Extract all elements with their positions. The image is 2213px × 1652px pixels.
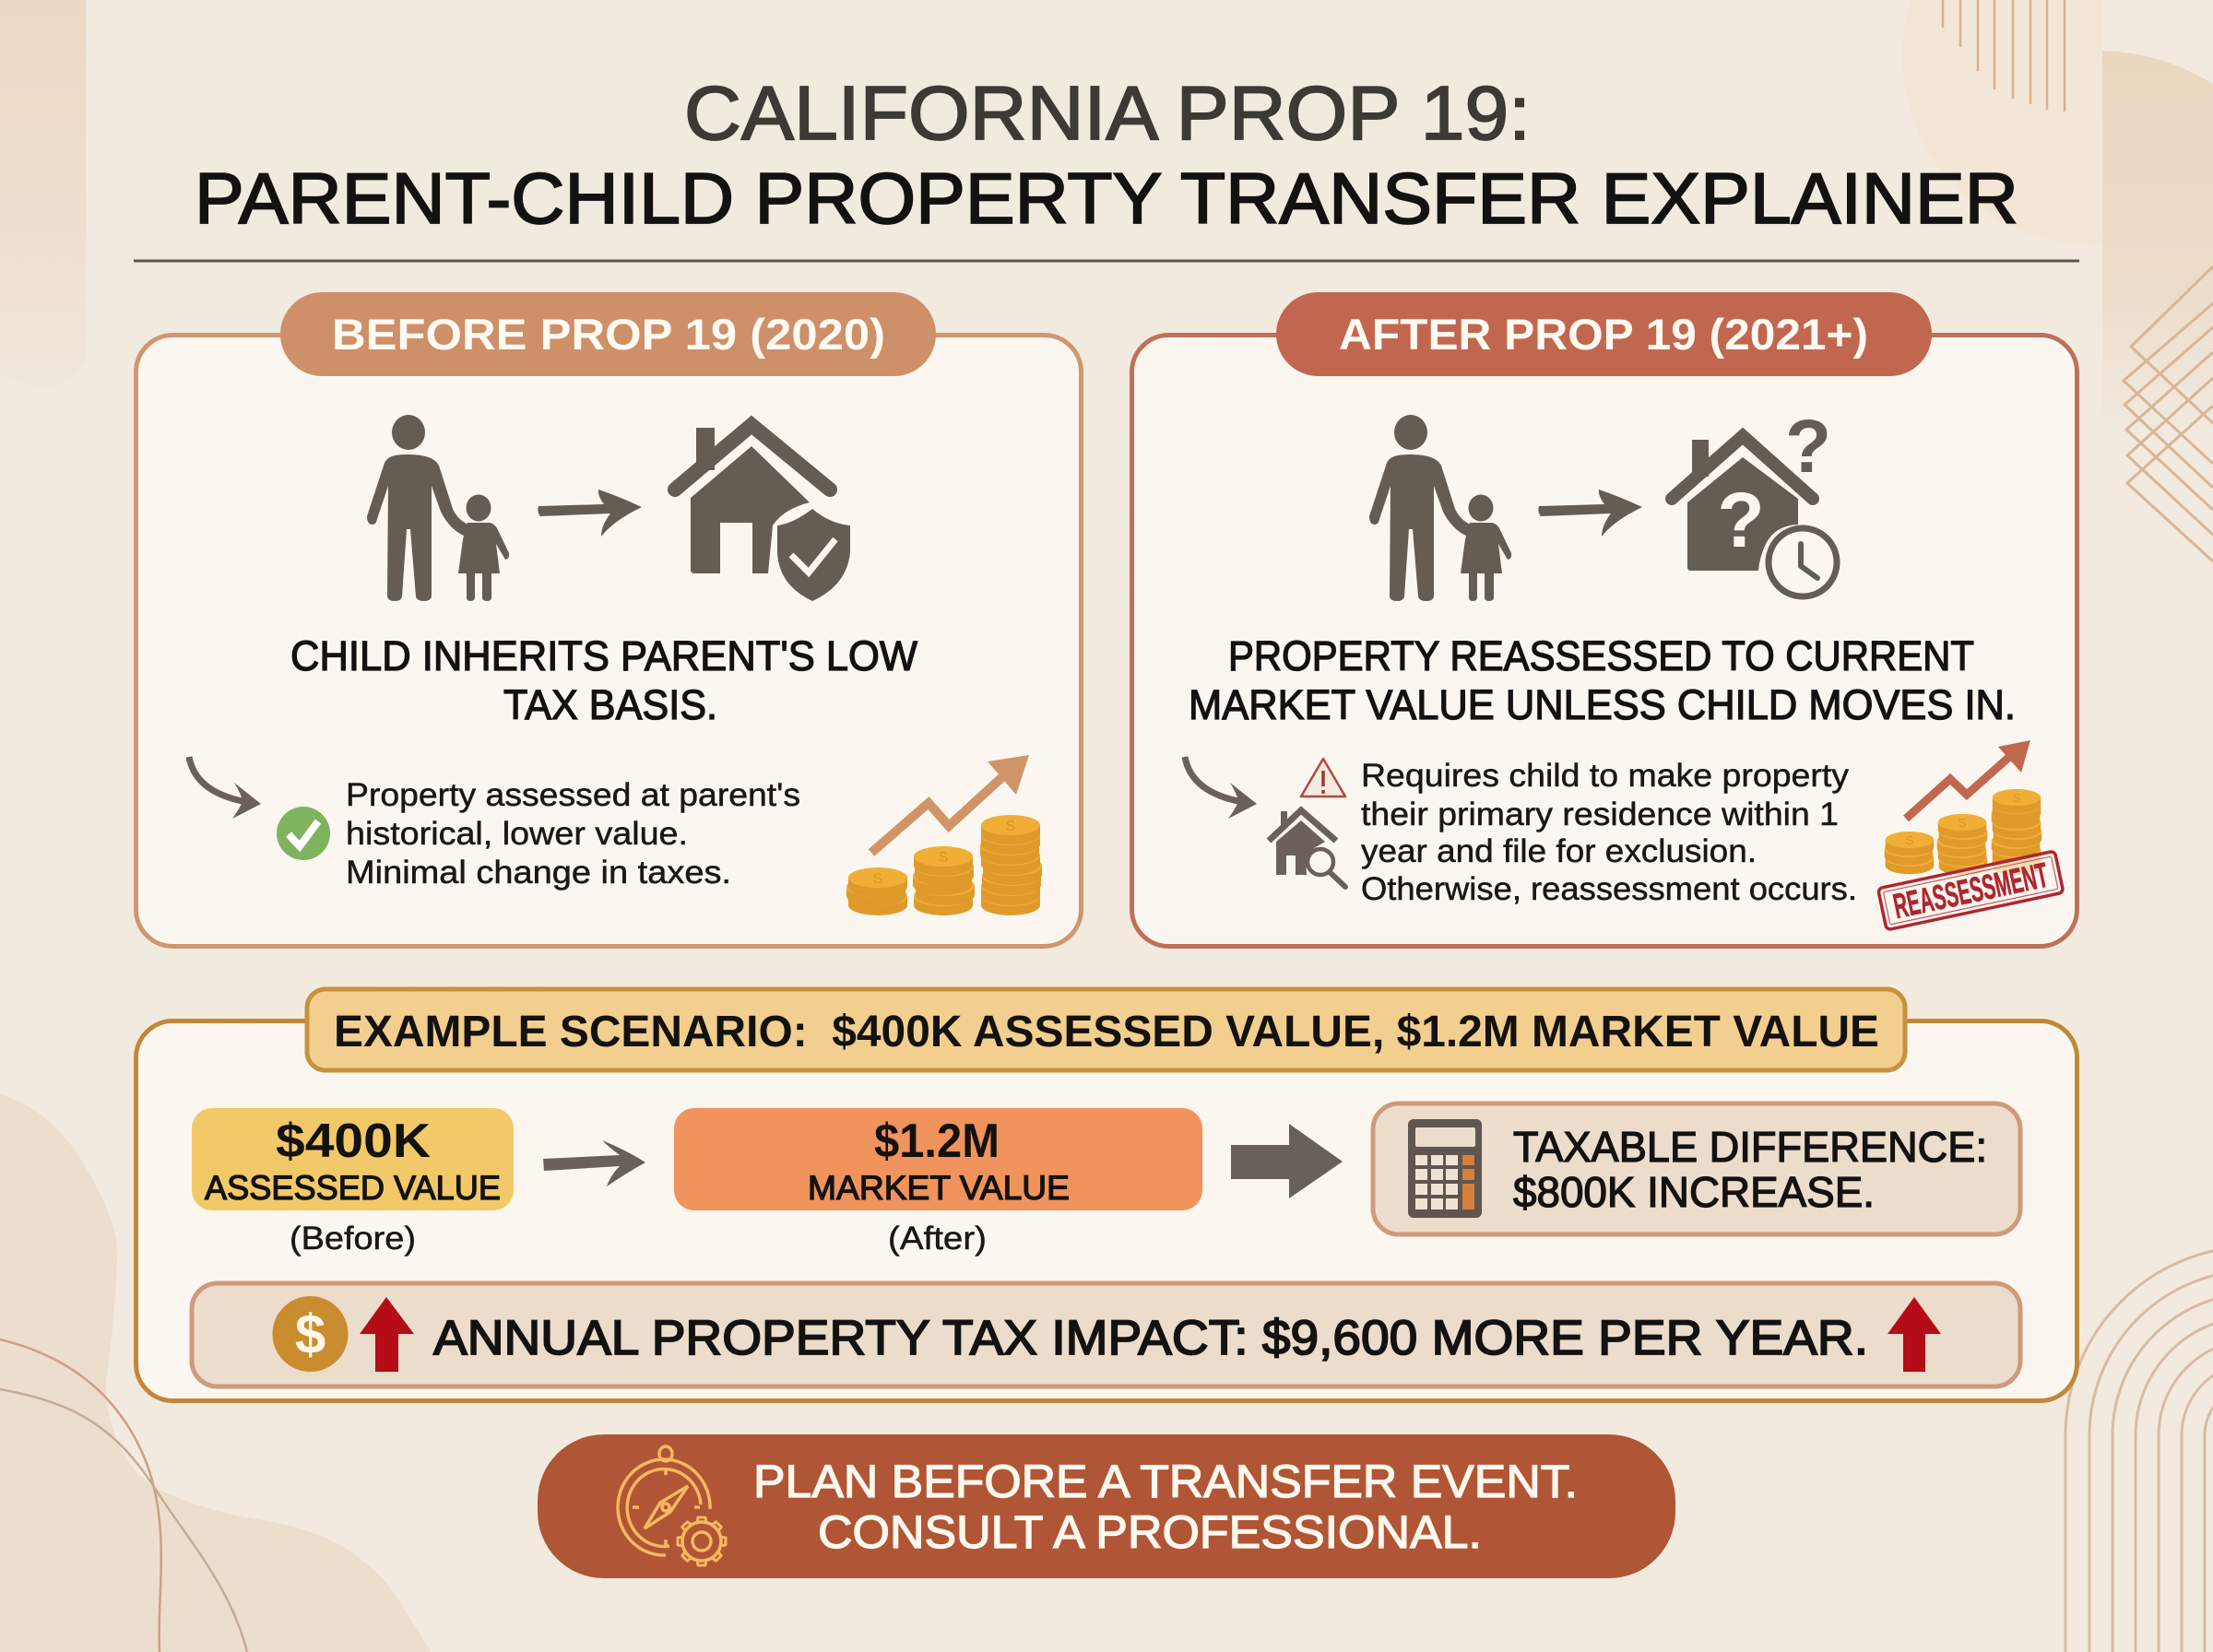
value box: market: $1.2M bbox=[874, 1115, 1000, 1168]
body text: before bbox=[346, 777, 800, 891]
pill heading: before bbox=[280, 292, 936, 376]
icon: house with question marks and clock: ? bbox=[1785, 405, 1831, 489]
body text: before: Minimal change in taxes. bbox=[346, 855, 731, 891]
panel: after prop 19 bbox=[1132, 292, 2077, 946]
icon: house with question marks and clock bbox=[1672, 405, 1837, 596]
icon: rising arrow and coins bbox=[846, 755, 1042, 915]
pill heading: after: AFTER PROP 19 (2021+) bbox=[1339, 310, 1868, 359]
decoration: bottom right arcs bbox=[2065, 1246, 2213, 1652]
callout: taxable difference bbox=[1373, 1103, 2020, 1234]
caption: after: (After) bbox=[888, 1221, 987, 1257]
call to action bbox=[538, 1434, 1675, 1578]
icon: dollar coin: $ bbox=[295, 1304, 325, 1365]
arrow: assessed to market bbox=[543, 1140, 645, 1186]
icon: red arrow left bbox=[360, 1297, 414, 1372]
icon: red arrow right bbox=[1888, 1297, 1941, 1372]
body text: before: Property assessed at parent's bbox=[346, 777, 800, 813]
decoration: bottom left blob and curves bbox=[0, 1094, 431, 1652]
icon: rising arrow and coins: S bbox=[2013, 791, 2021, 805]
statement: after: PROPERTY REASSESSED TO CURRENT bbox=[1228, 632, 1974, 679]
stamp: reassessment: REASSESSMENT bbox=[1890, 856, 2052, 926]
title: CALIFORNIA PROP 19: bbox=[684, 70, 1531, 156]
body text: after: year and file for exclusion. bbox=[1361, 833, 1757, 869]
icon: rising arrow and coins: S bbox=[1959, 816, 1967, 830]
value box: market bbox=[674, 1108, 1202, 1210]
icon: rising arrow and coins: S bbox=[873, 871, 882, 887]
statement: before: TAX BASIS. bbox=[503, 681, 717, 728]
callout: annual property tax impact: ANNUAL PROPERTY TAX IMPACT: $9,600 MORE PER YEAR. bbox=[433, 1311, 1868, 1365]
icon: parent and child bbox=[1369, 415, 1511, 601]
statement: after bbox=[1189, 632, 2016, 728]
decoration: top right circle and lines bbox=[1902, 0, 2102, 244]
panel: example scenario bbox=[136, 989, 2077, 1401]
icon: calculator bbox=[1408, 1119, 1482, 1218]
arrow: curved bbox=[189, 757, 261, 819]
arrow: to house bbox=[538, 490, 642, 537]
icon: green check bbox=[277, 807, 330, 860]
icon: rising arrow and coins bbox=[1885, 740, 2041, 875]
statement: after: MARKET VALUE UNLESS CHILD MOVES IN. bbox=[1189, 681, 2016, 728]
decoration: right wash and chevrons bbox=[2102, 51, 2213, 561]
arrow: to house bbox=[1538, 490, 1642, 537]
title: PARENT-CHILD PROPERTY TRANSFER EXPLAINER bbox=[195, 158, 2018, 239]
caption: before: (Before) bbox=[290, 1221, 416, 1257]
pill heading: after bbox=[1276, 292, 1932, 376]
title bbox=[195, 70, 2018, 239]
call to action: CONSULT A PROFESSIONAL. bbox=[818, 1506, 1482, 1558]
heading: example scenario bbox=[307, 989, 1905, 1070]
icon: parent and child bbox=[367, 415, 509, 601]
callout: taxable difference: $800K INCREASE. bbox=[1513, 1168, 1875, 1216]
icon: house with magnifier bbox=[1269, 810, 1345, 887]
pill heading: before: BEFORE PROP 19 (2020) bbox=[332, 310, 885, 359]
call to action: PLAN BEFORE A TRANSFER EVENT. bbox=[753, 1456, 1578, 1507]
body text: after: Requires child to make property bbox=[1361, 758, 1850, 794]
decoration: top left wash bbox=[0, 0, 86, 388]
heading: example scenario: EXAMPLE SCENARIO: $400K ASSESSED VALUE, $1.2M MARKET VALUE bbox=[334, 1008, 1879, 1056]
panel: before prop 19 bbox=[136, 292, 1081, 946]
body text: after: Otherwise, reassessment occurs. bbox=[1361, 871, 1857, 907]
value box: assessed bbox=[192, 1108, 514, 1210]
icon: warning triangle bbox=[1301, 759, 1345, 796]
body text: before: historical, lower value. bbox=[346, 816, 688, 852]
icon: compass and gear bbox=[618, 1446, 726, 1565]
icon: dollar coin bbox=[273, 1296, 349, 1372]
value box: assessed: ASSESSED VALUE bbox=[205, 1169, 501, 1207]
stamp: reassessment bbox=[1878, 851, 2064, 930]
icon: rising arrow and coins: S bbox=[1006, 819, 1015, 834]
statement: before: CHILD INHERITS PARENT'S LOW bbox=[290, 632, 918, 679]
icon: rising arrow and coins: S bbox=[1906, 833, 1914, 847]
icon: house with shield bbox=[675, 425, 850, 601]
value box: assessed: $400K bbox=[276, 1115, 431, 1168]
arrow: to taxable difference bbox=[1231, 1124, 1343, 1198]
callout: taxable difference: TAXABLE DIFFERENCE: bbox=[1513, 1123, 1987, 1171]
callout: annual property tax impact bbox=[192, 1283, 2020, 1386]
value box: market: MARKET VALUE bbox=[808, 1169, 1070, 1207]
arrow: curved bbox=[1185, 757, 1257, 819]
statement: before bbox=[290, 632, 918, 728]
icon: house with question marks and clock: ? bbox=[1717, 477, 1765, 563]
icon: rising arrow and coins: S bbox=[939, 850, 948, 866]
body text: after: their primary residence within 1 bbox=[1361, 796, 1839, 832]
body text: after bbox=[1361, 758, 1857, 907]
